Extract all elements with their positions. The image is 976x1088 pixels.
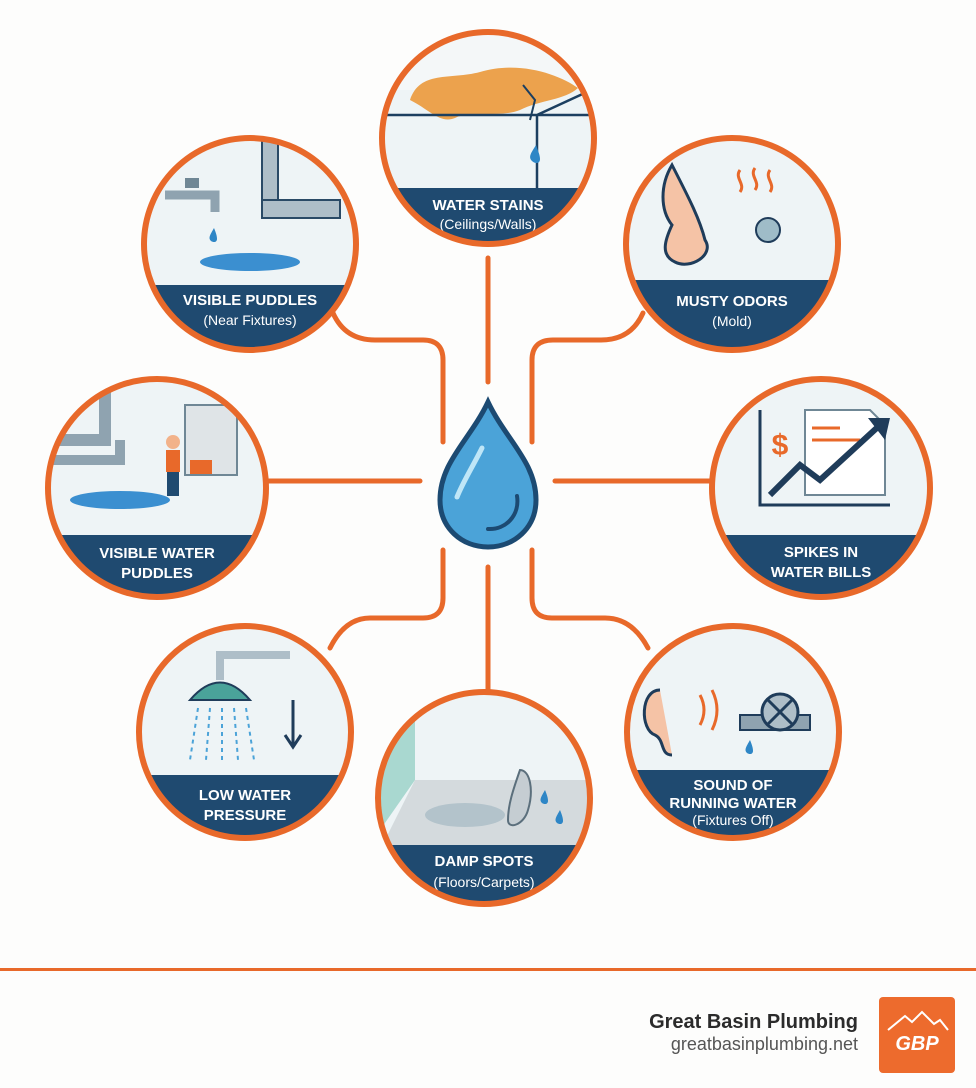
panel: visible water puddles: PUDDLES	[121, 565, 193, 582]
panel: spikes in water bills: $	[772, 429, 789, 462]
panel: damp spots: (Floors/Carpets)	[433, 874, 535, 890]
connectors	[267, 258, 712, 692]
panel: damp spots	[370, 690, 600, 915]
panel: visible puddles near fixtures: VISIBLE PUDDLES	[183, 292, 317, 309]
panel: spikes in water bills: WATER BILLS	[771, 564, 871, 581]
panel: musty odors: MUSTY ODORS	[676, 293, 788, 310]
panel: sound of running water: SOUND OF	[693, 777, 773, 794]
panel: visible puddles near fixtures	[140, 138, 360, 355]
logo	[879, 997, 955, 1073]
panel: visible puddles near fixtures: (Near Fixtures)	[203, 312, 297, 328]
panel: damp spots: DAMP SPOTS	[435, 853, 533, 870]
panel: sound of running water: RUNNING WATER	[669, 795, 797, 812]
panel: musty odors	[620, 138, 840, 350]
panel: visible water puddles: VISIBLE WATER	[99, 545, 215, 562]
panel: water stains	[380, 30, 600, 258]
panel: spikes in water bills: SPIKES IN	[784, 544, 858, 561]
footer divider	[0, 968, 976, 971]
panel: water stains: WATER STAINS	[432, 197, 544, 214]
panel: spikes in water bills	[709, 376, 933, 600]
panel: sound of running water: (Fixtures Off)	[692, 812, 774, 828]
panel: sound of running water	[620, 626, 850, 845]
panel: low water pressure: LOW WATER	[199, 787, 291, 804]
center water drop	[440, 402, 536, 547]
panel: visible water puddles	[45, 376, 269, 600]
footer brand text	[649, 1011, 858, 1054]
logo: GBP	[895, 1033, 939, 1055]
panel: low water pressure: PRESSURE	[204, 807, 286, 824]
panel: low water pressure	[130, 626, 360, 850]
panel: water stains: (Ceilings/Walls)	[440, 216, 536, 232]
footer brand text: greatbasinplumbing.net	[671, 1034, 858, 1054]
footer brand text: Great Basin Plumbing	[649, 1011, 858, 1033]
panel: musty odors: (Mold)	[712, 313, 752, 329]
